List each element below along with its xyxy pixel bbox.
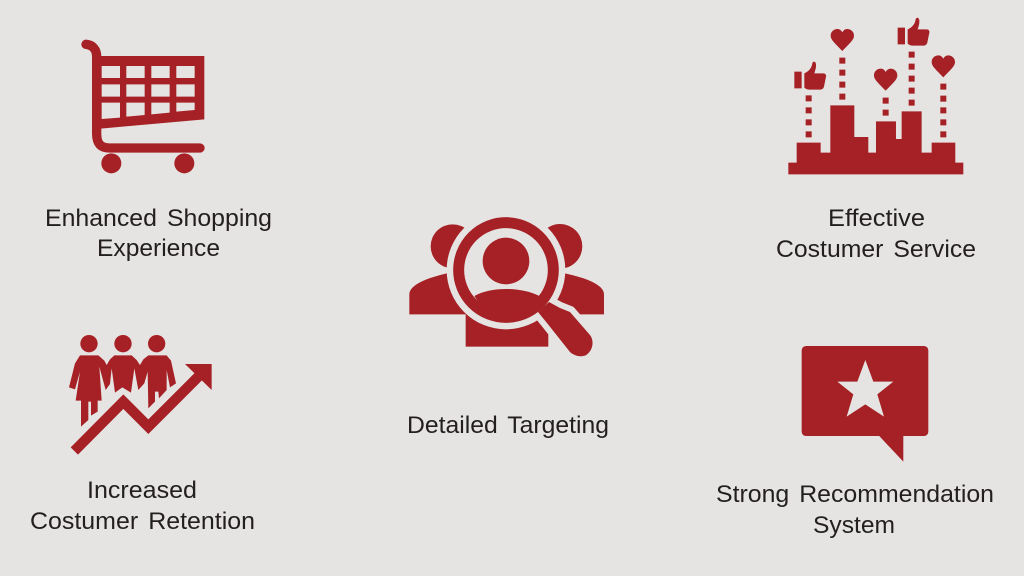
panel: strong recommendation system bbox=[716, 346, 994, 539]
panel: effective costumer service bbox=[776, 18, 976, 263]
icon: three people with rising arrow bbox=[69, 335, 212, 451]
icon: people under magnifying glass bbox=[409, 211, 604, 356]
label: effective costumer service: Costumer Service bbox=[776, 236, 976, 263]
panel: enhanced shopping experience bbox=[45, 44, 272, 262]
label: enhanced shopping experience: Enhanced Shopping bbox=[45, 205, 272, 232]
label: enhanced shopping experience bbox=[45, 205, 272, 262]
icon: skyline with hearts and thumbs bbox=[788, 18, 963, 174]
label: increased costumer retention bbox=[30, 477, 255, 535]
label: strong recommendation system: Strong Recommendation bbox=[716, 481, 994, 508]
panel: detailed targeting bbox=[407, 211, 609, 439]
label: increased costumer retention: Costumer Retention bbox=[30, 508, 255, 535]
label: strong recommendation system: System bbox=[813, 512, 895, 539]
label: detailed targeting: Detailed Targeting bbox=[407, 412, 609, 439]
label: effective costumer service bbox=[776, 205, 976, 263]
label: increased costumer retention: Increased bbox=[87, 477, 197, 504]
panel: increased costumer retention bbox=[30, 335, 255, 535]
label: enhanced shopping experience: Experience bbox=[97, 235, 220, 262]
icon: shopping cart bbox=[86, 44, 204, 173]
icon: speech bubble with star bbox=[802, 346, 928, 462]
label: strong recommendation system bbox=[716, 481, 994, 539]
label: effective costumer service: Effective bbox=[828, 205, 925, 232]
